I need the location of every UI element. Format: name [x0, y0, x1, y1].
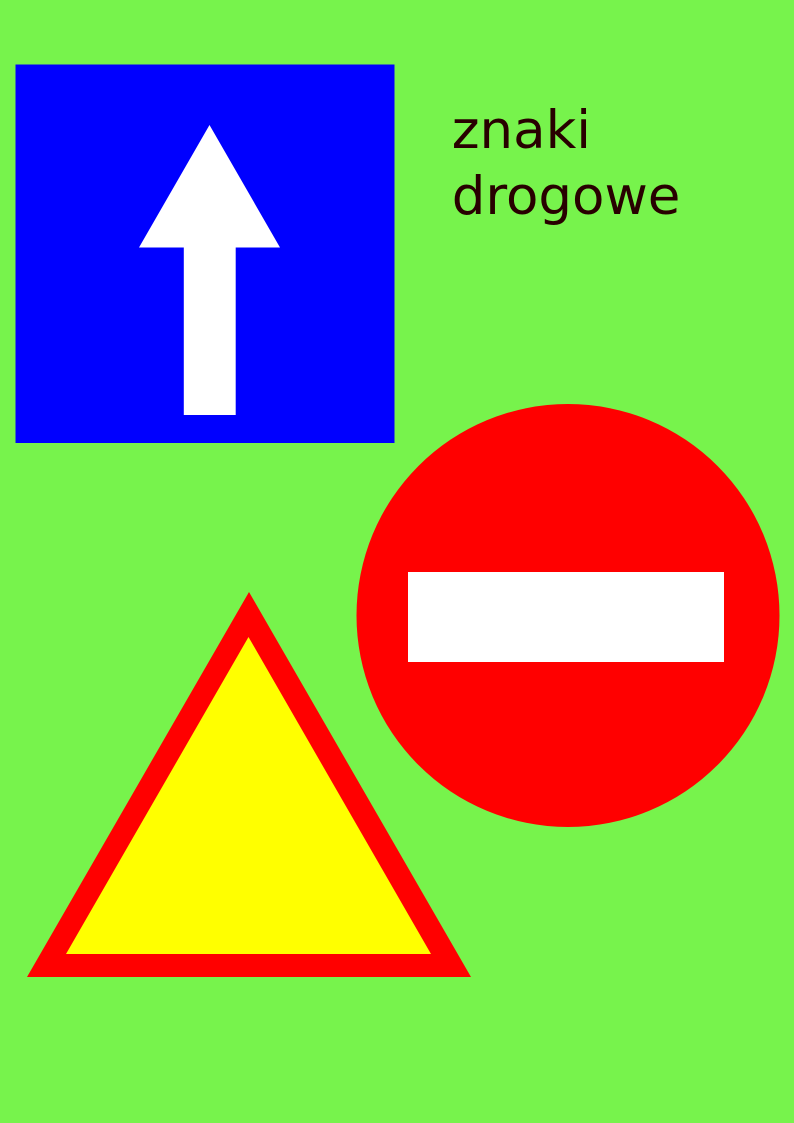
- title: znaki: [452, 100, 591, 161]
- sign: yellow warning triangle with red border: [27, 592, 471, 977]
- sign: red no-entry circle: [356, 404, 780, 827]
- white horizontal bar: [408, 572, 724, 662]
- sign: blue square with one-way arrow: [16, 64, 394, 443]
- title: drogowe: [452, 166, 680, 227]
- yellow triangle interior: [66, 637, 431, 954]
- icon: white up arrow: [139, 125, 280, 415]
